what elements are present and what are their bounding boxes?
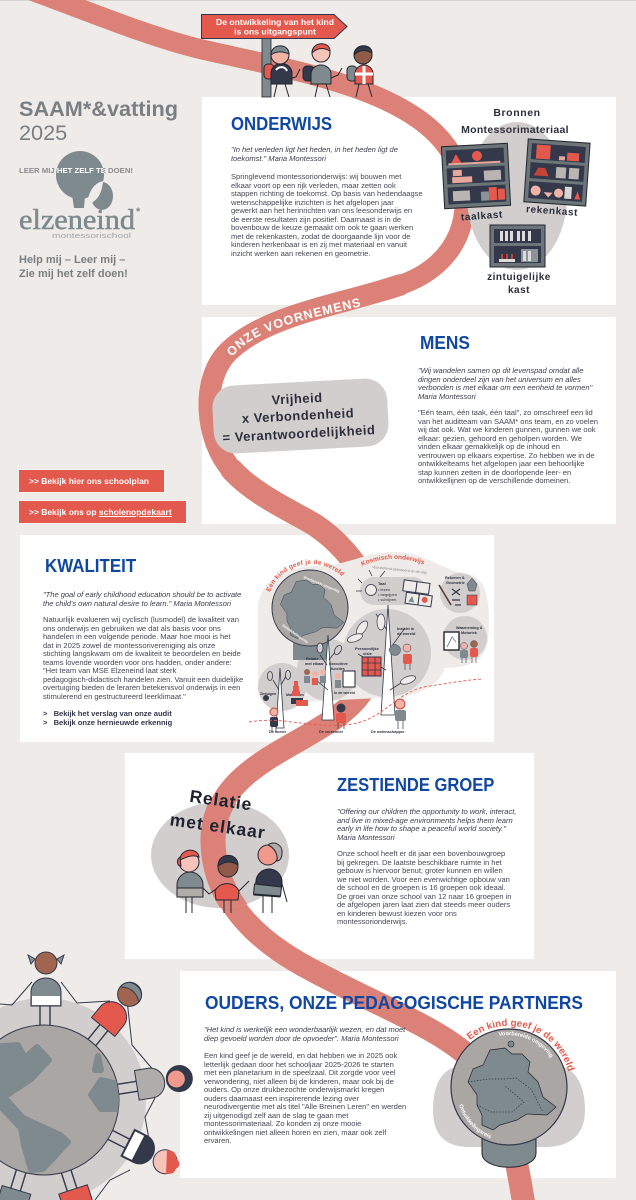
quote: zestiende groep	[337, 807, 516, 842]
text block: zestiende groep: we niet worden. Voor een evenwichtige opbouw van	[337, 874, 510, 884]
text block: mens: van het auditteam van SAAM* ons team, en zo voelen	[418, 416, 598, 426]
illustration: relatie met elkaar: met elkaar	[169, 809, 267, 843]
quote: ouders	[204, 1025, 406, 1042]
logo: elzeneind montessorischool: *	[136, 206, 141, 218]
button: schoolplan: >> Bekijk hier ons schoolplan	[29, 476, 149, 486]
quote: kwaliteit: the child's own natural desire to learn." Maria Montessori	[43, 598, 231, 608]
text block: mens	[418, 408, 598, 485]
text block: onderwijs: bovenbouw de keuze gemaakt om ook te gaan werken	[231, 223, 413, 232]
text block: onderwijs: inzicht werken aan rekenen en geometrie.	[231, 248, 370, 258]
illustration: ontwikkelingsmodel: Motoriek	[461, 631, 478, 635]
title: saam*&vatting 2025: 2025	[19, 120, 67, 145]
text block: kwaliteit	[43, 615, 243, 700]
text block: ouders: ervaren.	[204, 1136, 232, 1145]
signpost with three children	[201, 14, 374, 98]
illustration: ontwikkelingsmodel: met elkaar	[305, 662, 324, 666]
text block: onderwijs: Springlevend montessorionderwijs: wij bouwen met	[231, 172, 401, 181]
logo: elzeneind montessorischool: montessorischool	[52, 231, 131, 240]
text block: zestiende groep: de school en de groepen is 16 groepen ook ideaal.	[337, 883, 506, 892]
text block: mens: vertrouwen op elkaars expertise. Zo hebben we in de	[418, 450, 595, 460]
illustration: ontwikkelingsmodel: Relatie	[306, 657, 318, 661]
tagline	[19, 254, 128, 280]
text block: ouders: ouders. Op onze drukbezochte onderwijsmarkt kregen	[204, 1085, 384, 1094]
illustration: bronnen montessorimateriaal: Bronnen	[493, 107, 541, 119]
links: audit en erkenning: > Bekijk het verslag van onze audit	[43, 709, 172, 718]
links: audit en erkenning	[43, 709, 172, 726]
text block: zestiende groep: gebouw is hiervoor benut; groter kunnen en willen	[337, 866, 503, 875]
text block: kwaliteit: overtuiging bieden de leraren betekenisvol onderwijs in een	[43, 683, 240, 692]
illustration: ontwikkelingsmodel: • schrijven	[378, 597, 396, 602]
text block: ouders	[204, 1051, 406, 1145]
illustration: een kind geef je de wereld: Een kind geef je de wereld	[466, 1018, 575, 1071]
illustration: ontwikkelingsmodel: • lezen	[378, 587, 390, 592]
illustration: ontwikkelingsmodel: Executieve	[329, 662, 348, 666]
button: scholenopdekaart: >> Bekijk ons op scholenopdekaart	[29, 507, 172, 517]
text block: ouders: met een planetarium in de speelzaal. Dit zorgde voor veel	[204, 1068, 395, 1077]
text block: kwaliteit: teams lovende woorden voor ons hadden, onder andere:	[43, 658, 232, 666]
links: audit en erkenning: > Bekijk onze hernieuwde erkennig	[43, 718, 172, 726]
heading: mens: MENS	[420, 333, 470, 353]
illustration: ontwikkelingsmodel: Waarneming &	[456, 626, 483, 630]
illustration: een kind geef je de wereld	[433, 1018, 585, 1168]
quote: onderwijs: toekomst." Maria Montessori	[231, 154, 326, 162]
text block: zestiende groep	[337, 849, 511, 926]
text block: ouders: Een kind geef je de wereld, en dat hebben we in 2025 ook	[204, 1051, 397, 1060]
heading: zestiende groep: ZESTIENDE GROEP	[337, 775, 494, 795]
text block: onderwijs: wetenschappelijke inzichten is het afgelopen jaar	[231, 198, 394, 206]
callout: vrijheid x verbondenheid: = Verantwoordelijkheid	[222, 422, 376, 445]
text block: zestiende groep: De groei van onze school van 12 naar 16 groepen in	[337, 892, 511, 900]
text block: zestiende groep: bij gekregen. De laatste beschikbare ruimte in het	[337, 858, 502, 866]
panel: onderwijs	[202, 97, 616, 305]
text block: mens: "Eén team, één taak, één taal", zo omschreef een lid	[418, 408, 593, 417]
text block: zestiende groep: montessorionderwijs.	[337, 917, 408, 926]
text block: ouders: letterlijk gedaan door het schooljaar 2025-2026 te starten	[204, 1060, 394, 1068]
quote: ouders: "Het kind is werkelijk een wonderbaarlijk wezen, en dat moet	[204, 1025, 405, 1034]
illustration: ontwikkelingsmodel: functies	[331, 667, 345, 671]
quote: zestiende groep: Maria Montessori	[337, 832, 395, 842]
illustration: bronnen montessorimateriaal: zintuigelijke	[487, 272, 551, 283]
text block: ouders: montessorimateriaal. Zo konden zij onze mooie	[204, 1119, 361, 1128]
text block: ouders: verwondering, niet alleen bij de kinderen, maar ook bij de	[204, 1076, 394, 1086]
text block: ouders: neurodivergentie met als titel "Alle Breinen Leren" en werden	[204, 1102, 406, 1111]
illustration: ontwikkelingsmodel: • begrijpen	[378, 592, 397, 597]
logo: elzeneind montessorischool: LEER MIJ HET ZELF TE DOEN!	[19, 166, 133, 175]
quote: mens: dingen onderdeel zijn van het universum en alles	[418, 374, 581, 384]
illustration: children around the globe	[0, 952, 193, 1200]
text block: onderwijs: kinderen herkenbaar is en zij met materiaal en vanuit	[231, 240, 407, 249]
logo: elzeneind montessorischool	[19, 151, 141, 240]
illustration: bronnen montessorimateriaal	[440, 107, 591, 296]
text block: mens: elkaar: gezien, gehoord en geholpen worden. We	[418, 434, 582, 442]
quote: kwaliteit: "The goal of early childhood education should be to activate	[43, 590, 241, 599]
icon: signpost	[202, 14, 347, 97]
illustration: ontwikkelingsmodel: Kosmisch onderwijs	[360, 554, 424, 566]
text block: ouders: ouders daarnaast een inspirerende lezing over	[204, 1094, 359, 1102]
illustration: relatie met elkaar: Relatie	[188, 786, 254, 814]
quote: zestiende groep: early in life how to shape a peaceful world society."	[337, 824, 506, 833]
illustration: ontwikkelingsmodel: Inzicht in	[397, 626, 415, 631]
illustration: bronnen montessorimateriaal: kast	[508, 285, 530, 296]
quote: zestiende groep: "Offering our children the opportunity to work, interact,	[337, 807, 516, 816]
text block: mens: wij dat ook. Wat we kinderen gunnen, gunnen we ook	[418, 425, 596, 434]
illustration: ontwikkelingsmodel: Materialen	[286, 693, 304, 697]
illustration: ontwikkelingsmodel: Geometrie	[446, 581, 465, 585]
icon: signpost: is ons uitgangspunt	[234, 26, 316, 36]
callout: vrijheid x verbondenheid: Vrijheid	[271, 390, 323, 407]
button: schoolplan	[18, 469, 165, 493]
illustration: ontwikkelingsmodel: Rekenen &	[445, 576, 465, 580]
illustration: ontwikkelingsmodel: de wereld	[397, 631, 416, 636]
quote: mens	[418, 366, 593, 400]
illustration: ontwikkelingsmodel: visie	[363, 651, 373, 656]
quote: kwaliteit	[43, 590, 242, 608]
heading: kwaliteit: KWALITEIT	[45, 556, 136, 576]
quote: zestiende groep: and live in mixed-age environments helps them learn	[337, 816, 513, 824]
panel: ouders	[180, 971, 616, 1178]
text block: zestiende groep: Onze school heeft er dit jaar een bovenbouwgroep	[337, 849, 505, 858]
illustration: bronnen montessorimateriaal: rekenkast	[526, 204, 578, 219]
quote: mens: "Wij wandelen samen op dit levenspad omdat alle	[418, 366, 583, 375]
text block: kwaliteit: "Het team van MSE Elzeneind laat sterk	[43, 666, 176, 675]
text block: zestiende groep: de afgelopen jaren laat zien dat steeds meer ouders	[337, 900, 510, 909]
heading: onderwijs: ONDERWIJS	[231, 114, 332, 134]
text block: onderwijs: met de rekenkasten, zodat de doorgaande lijn voor de	[231, 232, 410, 240]
illustration: ontwikkelingsmodel: in de wereld	[334, 691, 355, 695]
callout: vrijheid x verbondenheid	[212, 378, 388, 454]
text block: onderwijs: de eerste resultaten zijn positief. Daarnaast is in de	[231, 214, 401, 224]
top rule	[0, 0, 636, 1]
text block: kwaliteit: Natuurlijk evalueren wij cyclisch (lusmodel) de kwaliteit van	[43, 615, 239, 624]
text block: kwaliteit: ons onderwijs en gebruiken we dat als basis voor ons	[43, 624, 221, 632]
illustration: ontwikkelingsmodel	[248, 552, 489, 734]
logo: elzeneind montessorischool: elzeneind	[19, 205, 135, 236]
text block: zestiende groep: en kinderen bewust kiezen voor ons	[337, 908, 457, 918]
quote: onderwijs: "In het verleden ligt het heden, in het heden ligt de	[231, 145, 398, 154]
logo: elzeneind montessorischool: LEER MIJ HET ZELF TE DOEN!	[19, 166, 133, 175]
quote: mens: verbonden is met elkaar om een eenheid te vormen"	[418, 383, 592, 392]
text block: kwaliteit: dat in 2025 zowel de montessorivereniging als onze	[43, 640, 215, 650]
panel: mens	[202, 317, 616, 524]
panel: zestiende groep	[125, 753, 534, 959]
illustration: een kind geef je de wereld: Ontwikkelingsreis	[460, 1104, 491, 1138]
heading: ouders: OUDERS, ONZE PEDAGOGISCHE PARTNERS	[205, 993, 583, 1013]
tagline: Zie mij het zelf doen!	[19, 268, 128, 280]
text block: mens: stap kunnen zetten in de doorlopende leer- en	[418, 468, 571, 476]
illustration: bronnen montessorimateriaal: Montessorimateriaal	[461, 124, 569, 136]
text block: kwaliteit: pedagogisch-didactisch handelen zien. Vanuit een duidelijke	[43, 674, 243, 684]
text block: onderwijs	[231, 172, 423, 258]
text block: mens: ontwikkellijnen op de verschillende domeinen.	[418, 476, 570, 485]
text block: ouders: ontwikkelingen niet alleen horen en zien, maar ook zelf	[204, 1128, 386, 1136]
text block: mens: ontwikkelteams het afgelopen jaar een behoorlijke	[418, 459, 584, 468]
text block: onderwijs: stappen richting de toekomst. Op basis van hedendaagse	[231, 189, 423, 198]
text block: mens: vinden elkaar gemakkelijk op de inhoud en	[418, 442, 560, 451]
quote: onderwijs	[231, 145, 398, 162]
illustration: ontwikkelingsmodel: De voeler	[269, 730, 287, 734]
illustration: relatie met elkaar	[151, 786, 289, 913]
title: saam*&vatting 2025: SAAM*&vatting	[19, 96, 178, 121]
text block: kwaliteit: handelen in een volgende periode. Maar hoe mooi is het	[43, 632, 230, 641]
illustration: een kind geef je de wereld: Voorbereide omgeving	[498, 1031, 553, 1058]
road label: onze voornemens: ONZE VOORNEMENS	[228, 298, 360, 355]
text block: kwaliteit: stichting langskwam om de kwaliteit te beoordelen en beide	[43, 649, 241, 658]
button: scholenopdekaart	[18, 500, 187, 524]
illustration: bronnen montessorimateriaal: taalkast	[461, 210, 503, 223]
callout: vrijheid x verbondenheid: x Verbondenheid	[242, 405, 354, 426]
text block: onderwijs: elkaar voort op een rijk verleden, maar zetten ook	[231, 180, 396, 190]
illustration: ontwikkelingsmodel: Voorstellend gebaseerd op de dag	[372, 565, 427, 575]
illustration: ontwikkelingsmodel: Zintuigen	[260, 692, 276, 696]
icon: signpost: De ontwikkeling van het kind	[216, 17, 334, 27]
quote: mens: Maria Montessori	[418, 392, 476, 400]
icon: children with backpacks	[264, 44, 373, 97]
tagline: Help mij – Leer mij –	[19, 254, 125, 266]
text block: ouders: zij uitgenodigd zelf aan de slag te gaan met	[204, 1110, 348, 1120]
illustration: ontwikkelingsmodel: Ontwikkelingsreis	[281, 624, 309, 644]
illustration: ontwikkelingsmodel: Een kind geef je de wereld	[266, 559, 345, 592]
illustration: ontwikkelingsmodel: Voorbereide omgeving	[303, 575, 340, 593]
text block: kwaliteit: stimulerend en gestructureerd leerklimaat."	[43, 692, 186, 700]
panel: kwaliteit	[20, 535, 494, 742]
text block: onderwijs: gewerkt aan het herinrichten van ons leesonderwijs en	[231, 206, 412, 215]
illustration: ontwikkelingsmodel: Taal	[378, 581, 386, 586]
quote: ouders: diep gevoeld worden door de opvoeder". Maria Montessori	[204, 1034, 399, 1042]
illustration: ontwikkelingsmodel: De verkenner	[319, 730, 344, 734]
illustration: ontwikkelingsmodel: Persoonlijke	[355, 646, 380, 651]
title: saam*&vatting 2025	[19, 96, 178, 145]
illustration: ontwikkelingsmodel: De wetenschapper	[371, 730, 405, 734]
